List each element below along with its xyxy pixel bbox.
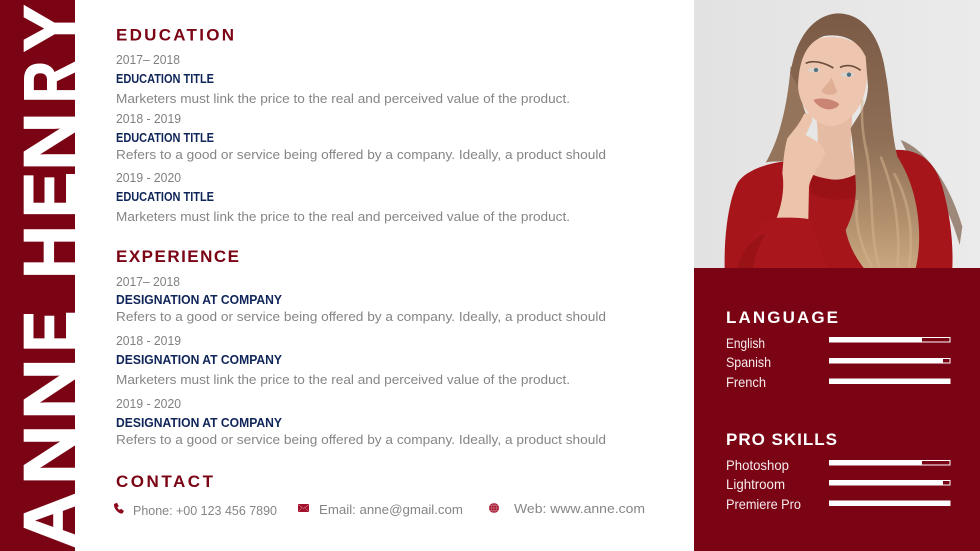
- experience entry 3: 2019 - 2020: [116, 396, 181, 411]
- name: A: [10, 492, 91, 548]
- education entry 2: 2018 - 2019: [116, 111, 181, 126]
- education entry 1: Marketers must link the price to the real and perceived value of the product.: [116, 91, 570, 106]
- neck: [811, 113, 857, 179]
- panel: experience: [116, 247, 606, 447]
- experience entry 3: [116, 396, 606, 447]
- hair highlight strands: [856, 100, 911, 267]
- icon: globe: [489, 503, 499, 513]
- education entry 1: [116, 52, 570, 106]
- experience entry 3: DESIGNATION AT COMPANY: [116, 415, 282, 430]
- back hair left over shoulder: [766, 67, 806, 163]
- name: E: [10, 172, 91, 218]
- skill labels: Photoshop: [726, 457, 789, 473]
- panel: education: [116, 26, 606, 224]
- language labels: Spanish: [726, 354, 771, 370]
- experience entry 2: Marketers must link the price to the real and perceived value of the product.: [116, 372, 570, 387]
- education entry 3: EDUCATION TITLE: [116, 189, 214, 204]
- education entry 1: EDUCATION TITLE: [116, 71, 214, 86]
- experience entry 2: [116, 333, 570, 387]
- experience entry 1: [116, 274, 606, 324]
- name: N: [10, 424, 91, 485]
- heading: language: LANGUAGE: [726, 308, 838, 327]
- flyaway hair: [901, 140, 962, 245]
- education entry 2: [116, 111, 606, 162]
- name: E: [10, 311, 91, 352]
- name: N: [10, 112, 91, 171]
- skill labels: Premiere Pro: [726, 496, 801, 512]
- education entry 3: 2019 - 2020: [116, 170, 181, 185]
- skill labels: [726, 457, 801, 512]
- heading: education: EDUCATION: [116, 26, 234, 44]
- sweater cuff: [737, 218, 829, 268]
- phone text: Phone: +00 123 456 7890: [133, 503, 277, 518]
- nose: [821, 77, 837, 95]
- language bars: [829, 337, 950, 384]
- education entry 3: Marketers must link the price to the real and perceived value of the product.: [116, 209, 570, 224]
- experience entry 2: DESIGNATION AT COMPANY: [116, 352, 282, 367]
- education entry 1: 2017– 2018: [116, 52, 180, 67]
- sidebar name band: [0, 0, 91, 551]
- education entry 2: EDUCATION TITLE: [116, 130, 214, 145]
- name: H: [10, 225, 91, 279]
- eyes: [808, 68, 854, 77]
- sweater fold: [737, 233, 766, 268]
- heading: experience: EXPERIENCE: [116, 247, 239, 266]
- icon: phone: [114, 503, 124, 514]
- icon: email: [298, 504, 309, 512]
- language labels: French: [726, 374, 766, 390]
- education entry 3: [116, 170, 570, 224]
- panel: contact: [114, 472, 645, 518]
- face: [798, 37, 867, 126]
- name: R: [10, 61, 91, 103]
- skill bars: [829, 460, 950, 506]
- email text: Email: anne@gmail.com: [319, 502, 463, 517]
- language labels: [726, 335, 771, 390]
- experience entry 1: DESIGNATION AT COMPANY: [116, 292, 282, 307]
- hand and wrist: [777, 113, 825, 219]
- language labels: English: [726, 335, 765, 351]
- eyebrows: [806, 62, 861, 70]
- hair over forehead: [791, 13, 919, 268]
- web text: Web: www.anne.com: [514, 501, 645, 516]
- experience entry 2: 2018 - 2019: [116, 333, 181, 348]
- lips: [813, 99, 839, 109]
- heading: contact: CONTACT: [116, 472, 214, 491]
- portrait photo: [694, 0, 980, 268]
- experience entry 1: Refers to a good or service being offered by a company. Ideally, a product should: [116, 309, 606, 324]
- experience entry 1: 2017– 2018: [116, 274, 180, 289]
- sweater: [725, 150, 953, 268]
- sweater collar: [811, 174, 856, 200]
- name: Y: [10, 5, 91, 52]
- experience entry 3: Refers to a good or service being offered by a company. Ideally, a product should: [116, 432, 606, 447]
- skill labels: Lightroom: [726, 476, 785, 492]
- heading: pro skills: PRO SKILLS: [726, 430, 837, 449]
- panel: right sidebar: [694, 268, 980, 551]
- name: N: [10, 358, 91, 420]
- education entry 2: Refers to a good or service being offered by a company. Ideally, a product should: [116, 147, 606, 162]
